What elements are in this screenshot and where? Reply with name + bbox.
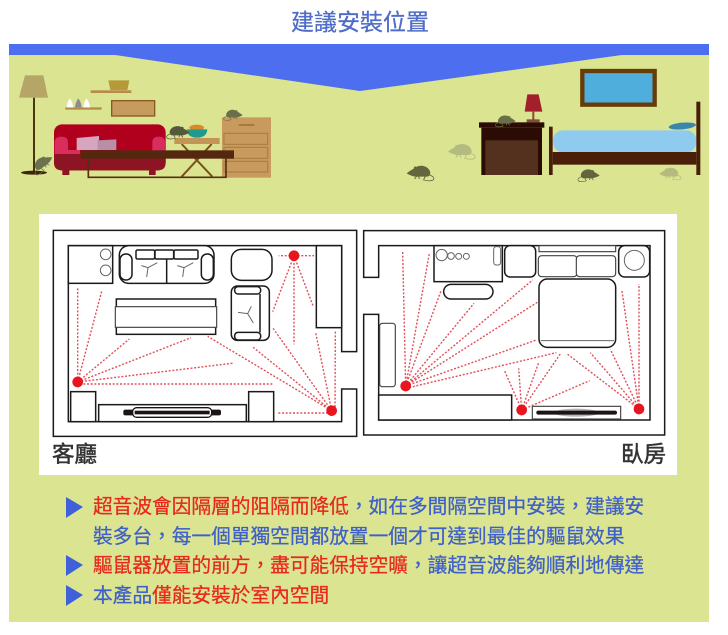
- cabinet with two stools: [68, 246, 113, 283]
- white floor plan panel: [39, 214, 677, 475]
- room walls: [364, 231, 665, 435]
- armchair: [231, 286, 269, 340]
- icon: wall shelves: [65, 80, 131, 110]
- text: bullet 1 line 1: 超音波會因隔層的阻隔而降低，如在多間隔空間中安裝，建議安: [93, 496, 644, 518]
- sofa plan: [119, 246, 214, 283]
- bullet arrow 2: [66, 555, 83, 576]
- couch along wall: [380, 323, 395, 387]
- text: bullet 2: 驅鼠器放置的前方，盡可能保持空曠，讓超音波能夠順利地傳達: [93, 555, 644, 577]
- icon: wall picture: [582, 71, 655, 105]
- icon: side table with bowl: [174, 125, 220, 177]
- nightstand plan: [505, 246, 536, 277]
- icon: rat on sofa: [167, 126, 190, 139]
- icon: rat on lamp base: [30, 152, 56, 176]
- icon: faded rat on floor: [448, 144, 475, 159]
- bedroom illustration: [407, 71, 700, 182]
- red repeller markers: [72, 250, 337, 416]
- bullet arrow 3: [66, 585, 83, 606]
- text: bullet 3: 本產品僅能安裝於室內空間: [93, 585, 329, 607]
- round side table: [619, 246, 650, 277]
- icon: nightstand: [479, 122, 544, 175]
- icon: sofa: [54, 124, 166, 175]
- oval stool: [444, 284, 493, 299]
- icon: floor lamp: [19, 75, 48, 175]
- bed plan: [538, 246, 616, 347]
- ottoman: [231, 249, 272, 280]
- text: bullet 1 line 2: 裝多台，每一個單獨空間都放置一個才可達到最佳的驅鼠效果: [93, 526, 625, 548]
- icon: red table lamp: [525, 94, 542, 122]
- floor plan: bedroom: [364, 231, 665, 435]
- icon: dresser: [222, 117, 271, 178]
- icon: rat on dresser: [224, 110, 243, 120]
- tv stand: [99, 405, 246, 422]
- icon: bed: [549, 102, 700, 175]
- icon: dark rat on floor: [407, 166, 434, 181]
- icon: rat under bed: [578, 169, 600, 182]
- label: bedroom: 臥房: [621, 442, 666, 467]
- ultrasonic range lines: [78, 256, 335, 413]
- living room illustration: [19, 75, 271, 178]
- icon: wall picture: [112, 101, 155, 116]
- red repeller markers: [400, 381, 644, 415]
- bullet arrow 1: [66, 497, 83, 518]
- tv stand: [532, 406, 621, 419]
- blue roof banner: [9, 44, 709, 91]
- low cabinet: [379, 395, 512, 420]
- speakers: [71, 392, 274, 422]
- icon: rat on nightstand: [495, 115, 516, 127]
- label: living room: 客廳: [52, 442, 97, 467]
- title: 建議安裝位置: [291, 9, 429, 35]
- wardrobe: [316, 246, 342, 328]
- floor plan: living room: [53, 230, 357, 436]
- coffee table plan: [115, 299, 217, 334]
- icon: faded rat under bed: [659, 168, 681, 180]
- sideboard: [434, 246, 502, 282]
- room walls: [53, 230, 357, 436]
- ultrasonic range lines: [403, 252, 639, 410]
- icon: coffee table: [81, 150, 234, 177]
